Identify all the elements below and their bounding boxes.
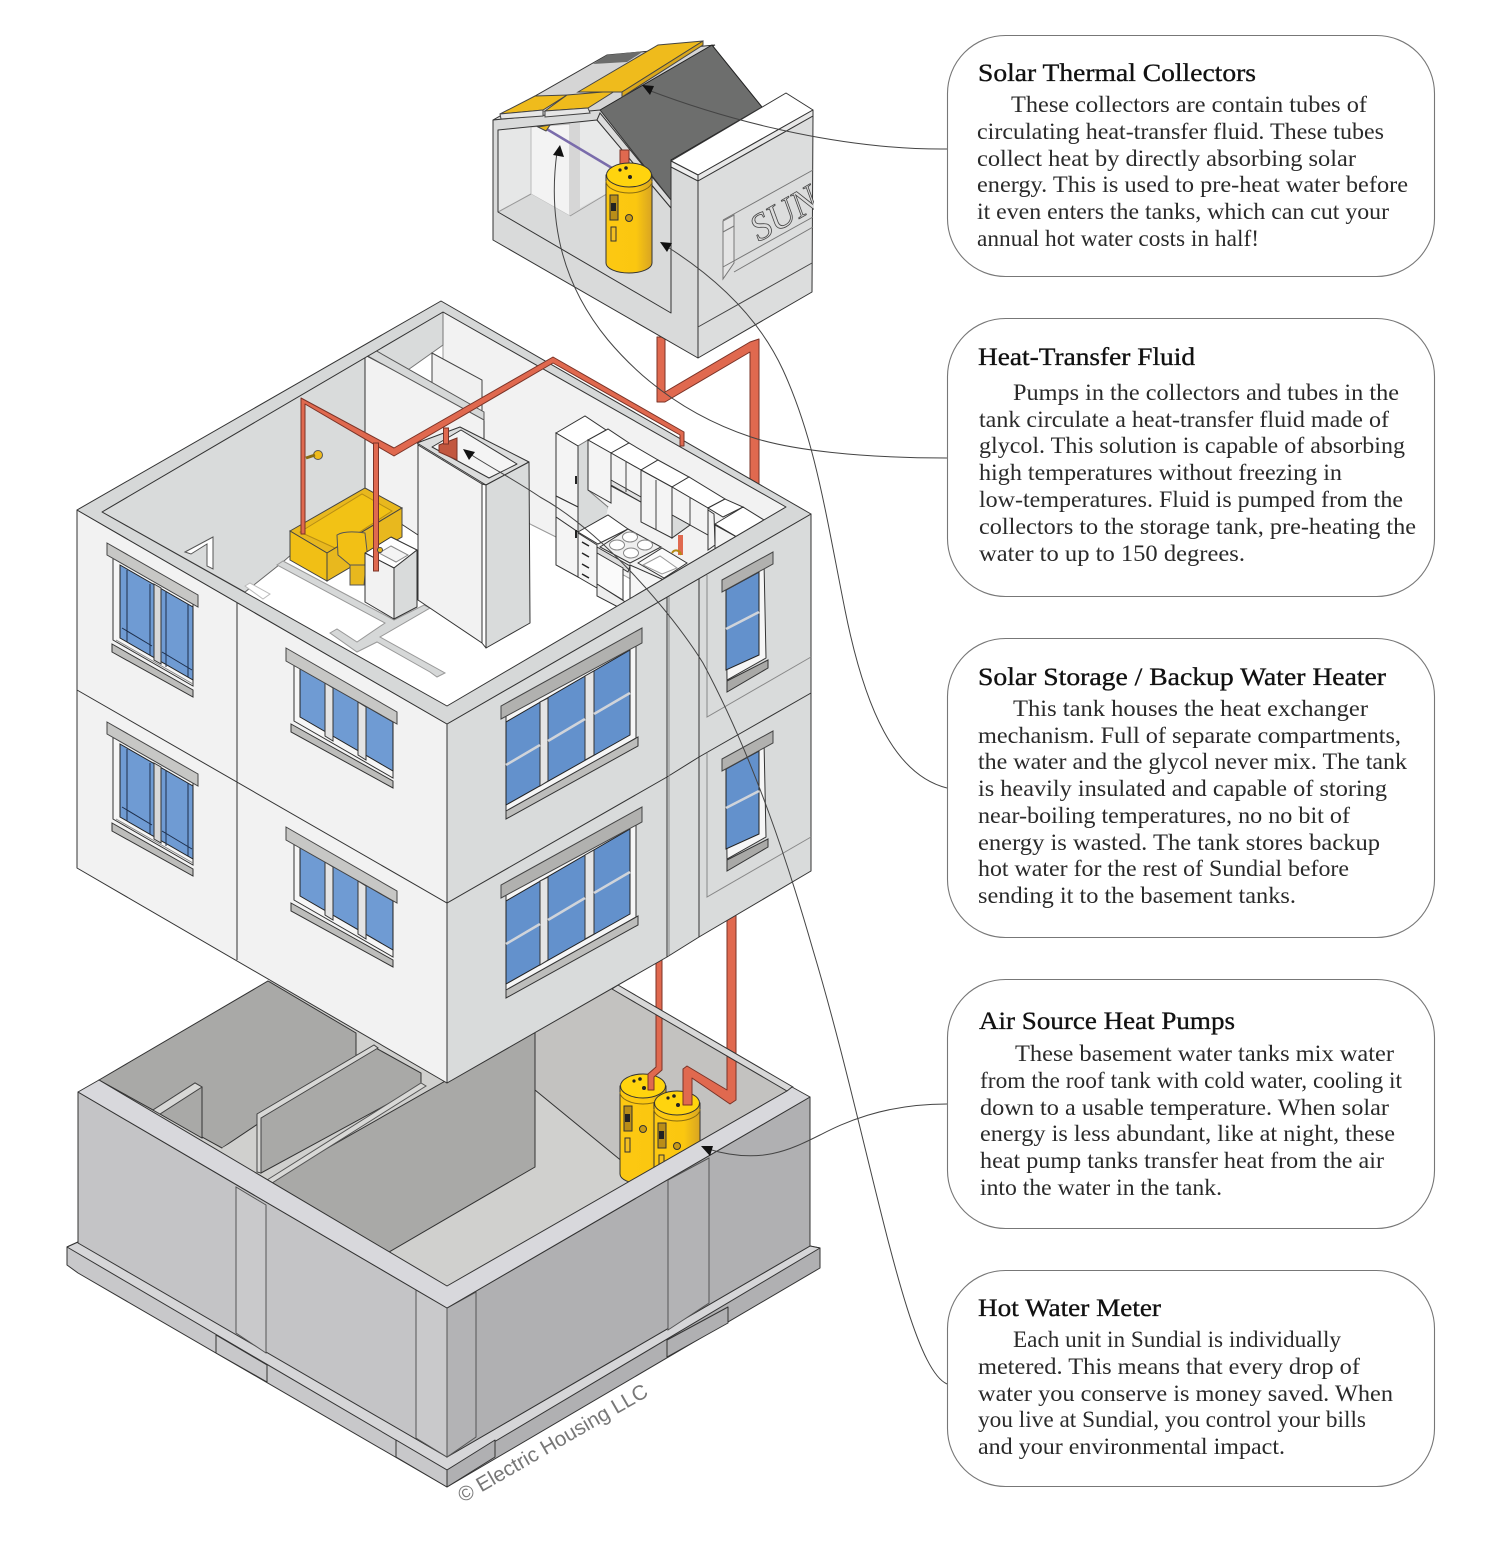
icon: storage tank xyxy=(606,163,652,273)
body text: Pumps in the collectors and tubes in the xyxy=(1013,380,1399,406)
window: left face upper, 2 pane xyxy=(107,543,198,697)
sign lettering: SUN xyxy=(742,176,828,250)
body text: into the water in the tank. xyxy=(980,1175,1222,1201)
body text: Each unit in Sundial is individually xyxy=(1013,1327,1341,1353)
body text: These basement water tanks mix water xyxy=(1015,1041,1394,1067)
rooftop mechanical section xyxy=(493,41,854,365)
left wall xyxy=(102,356,365,592)
arrow: solar thermal collectors xyxy=(642,85,947,149)
body text: sending it to the basement tanks. xyxy=(978,883,1296,909)
body text: circulating heat-transfer fluid. These tubes xyxy=(977,119,1384,145)
body text: This tank houses the heat exchanger xyxy=(1013,696,1368,722)
arrow: heat pumps xyxy=(701,1104,947,1156)
body text: tank circulate a heat-transfer fluid made of xyxy=(979,407,1389,433)
basement outer walls xyxy=(67,985,820,1487)
body text: near-boiling temperatures, no no bit of xyxy=(978,803,1350,829)
heading: Hot Water Meter xyxy=(978,1295,1162,1322)
bathtub xyxy=(290,488,402,585)
arrow: storage tank xyxy=(660,242,947,788)
floor strips xyxy=(277,561,445,677)
right parapet block with sign xyxy=(671,85,854,365)
body text: mechanism. Full of separate compartments, xyxy=(978,723,1401,749)
body text: These collectors are contain tubes of xyxy=(1011,92,1367,118)
window: right side upper xyxy=(722,552,773,692)
body text: low-temperatures. Fluid is pumped from the xyxy=(979,487,1403,513)
panel: air source heat pumps xyxy=(948,980,1434,1228)
shower head xyxy=(306,450,322,460)
room interior xyxy=(498,113,671,313)
body text: metered. This means that every drop of xyxy=(978,1354,1360,1380)
pipes from building to basement tanks xyxy=(648,910,736,1105)
upper building xyxy=(77,301,811,1083)
roof parapet rim xyxy=(77,301,811,724)
heading: Heat-Transfer Fluid xyxy=(978,344,1196,371)
basement interior walls and floor xyxy=(99,981,787,1286)
apartment interior xyxy=(102,312,786,706)
body text: and your environmental impact. xyxy=(978,1434,1285,1460)
building illustration xyxy=(67,41,947,1507)
panel: solar thermal collectors xyxy=(948,36,1434,276)
body text: you live at Sundial, you control your bills xyxy=(978,1407,1366,1433)
utility column xyxy=(417,427,530,648)
sink cabinet xyxy=(365,537,417,619)
heading: Solar Storage / Backup Water Heater xyxy=(978,664,1387,691)
panel: heat-transfer fluid xyxy=(948,318,1434,596)
plumbing pipes inside the unit xyxy=(301,357,684,571)
body text xyxy=(978,1327,1393,1460)
closet xyxy=(373,312,482,430)
body text: down to a usable temperature. When solar xyxy=(980,1095,1389,1121)
body text: it even enters the tanks, which can cut your xyxy=(977,199,1389,225)
window: front face lower, 3 pane xyxy=(501,807,642,998)
body text xyxy=(980,1041,1402,1201)
window: left face lower, 2 pane xyxy=(107,722,198,876)
window: right side lower xyxy=(722,731,773,871)
body text: is heavily insulated and capable of storing xyxy=(978,776,1387,802)
heading: Solar Thermal Collectors xyxy=(978,60,1256,87)
body text: water you conserve is money saved. When xyxy=(978,1381,1393,1407)
arrow: heat-transfer fluid xyxy=(553,145,947,458)
left face of the building xyxy=(77,510,447,1083)
body text: annual hot water costs in half! xyxy=(977,226,1259,252)
window: left face lower, 3 pane xyxy=(286,827,397,967)
body text: energy is less abundant, like at night, these xyxy=(980,1121,1395,1147)
copyright text: © Electric Housing LLC xyxy=(454,1380,652,1507)
body text: energy is wasted. The tank stores backup xyxy=(978,830,1380,856)
glycol tube xyxy=(545,128,622,174)
heading: Air Source Heat Pumps xyxy=(979,1008,1235,1035)
panel: hot water meter xyxy=(948,1270,1434,1486)
body text: collect heat by directly absorbing solar xyxy=(977,146,1356,172)
partition wall xyxy=(365,355,484,535)
body text xyxy=(977,92,1408,252)
solar thermal collector panels xyxy=(500,41,703,119)
panel: solar storage / backup water heater xyxy=(948,638,1434,938)
leader arrows xyxy=(463,85,947,1384)
right face of the building xyxy=(447,514,811,1083)
pipes from roof to building xyxy=(657,337,759,490)
window: left face upper, 3 pane xyxy=(286,648,397,788)
gable front face with cut-away opening xyxy=(493,110,698,358)
body text: heat pump tanks transfer heat from the air xyxy=(980,1148,1384,1174)
body text: hot water for the rest of Sundial before xyxy=(978,856,1349,882)
body text: water to up to 150 degrees. xyxy=(979,541,1245,567)
floor drain mark xyxy=(245,583,270,599)
arrow: hot water meter xyxy=(463,449,947,1384)
door at left xyxy=(185,537,213,569)
body text xyxy=(978,696,1407,909)
body text: collectors to the storage tank, pre-heating the xyxy=(979,514,1416,540)
body text xyxy=(979,380,1416,567)
basement level xyxy=(67,910,820,1487)
outer walls xyxy=(77,301,811,1083)
body text: energy. This is used to pre-heat water before xyxy=(977,172,1408,198)
roof: grey plane and dark roof xyxy=(493,45,762,208)
window: front face upper, 3 pane xyxy=(501,628,642,819)
back wall xyxy=(443,312,786,590)
kitchen xyxy=(556,416,764,608)
body text: glycol. This solution is capable of absorbing xyxy=(979,433,1405,459)
body text: high temperatures without freezing in xyxy=(979,460,1342,486)
icon: basement heat pump tanks xyxy=(620,1074,700,1201)
body text: from the roof tank with cold water, cooling it xyxy=(980,1068,1402,1094)
body text: the water and the glycol never mix. The tank xyxy=(978,749,1407,775)
